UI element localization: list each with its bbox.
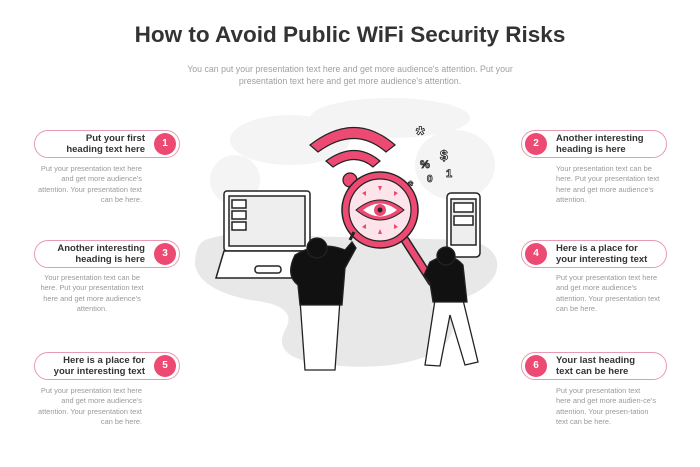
pill 3	[34, 240, 180, 268]
pill 2	[521, 130, 667, 158]
desc 6: Put your presentation text here and get more audien-ce's attention. Your presen-tation text can be here.	[556, 386, 656, 426]
item 1	[34, 130, 180, 204]
pill 6: Your last heading	[556, 355, 635, 366]
item 5	[34, 352, 180, 426]
title: How to Avoid Public WiFi Security Risks	[135, 22, 565, 47]
item 4	[521, 240, 667, 313]
pill 5: your interesting text	[54, 366, 145, 376]
symbols: $	[440, 147, 448, 163]
icon: laptop	[216, 191, 318, 278]
pill 5: Here is a place for	[63, 355, 145, 366]
desc 3: Your presentation text can be here. Put your presentation text here and get more audience's attention.	[40, 273, 144, 313]
subtitle: You can put your presentation text here and get more audience's attention. Put your presentation text here and get more audience's attention.	[187, 64, 513, 86]
symbols: 0	[427, 174, 433, 185]
icon: wifi arcs	[310, 128, 395, 187]
person left	[291, 232, 356, 370]
pill 2: heading is here	[556, 144, 626, 154]
pill 2: 2	[533, 138, 539, 149]
pill 5	[34, 352, 180, 380]
desc 2: Your presentation text can be here. Put your presentation text here and get more audience's attention.	[556, 164, 659, 204]
pill 4: your interesting text	[556, 254, 647, 264]
item 2	[521, 130, 667, 204]
pill 4: 4	[533, 248, 539, 259]
item 6	[521, 352, 667, 426]
desc 5: Put your presentation text here and get more audience's attention. Your presentation text can be here.	[38, 386, 142, 426]
pill 1: Put your first	[86, 133, 145, 144]
pill 4: Here is a place for	[556, 243, 638, 254]
icon: magnifier with eye	[342, 172, 432, 282]
pill 6	[521, 352, 667, 380]
pill 1	[34, 130, 180, 158]
symbols: 1	[446, 168, 452, 180]
desc 4: Put your presentation text here and get more audience's attention. Your presentation text can be here.	[556, 273, 660, 313]
floor blob	[195, 233, 497, 367]
desc 1: Put your presentation text here and get more audience's attention. Your presentation text can be here.	[38, 164, 142, 204]
pill 3: 3	[162, 248, 168, 259]
pill 5: 5	[162, 360, 168, 371]
world map background	[210, 98, 495, 205]
pill 6: text can be here	[556, 366, 628, 376]
person right	[424, 247, 478, 366]
icon: phone	[447, 193, 480, 257]
pill 1: heading text here	[66, 144, 145, 154]
symbols	[408, 122, 452, 193]
pill 1: 1	[162, 138, 168, 149]
item 3	[34, 240, 180, 313]
pill 2: Another interesting	[556, 133, 644, 144]
symbols: *	[416, 122, 425, 147]
pill 3: heading is here	[75, 254, 145, 264]
symbols: *	[408, 178, 414, 193]
pill 4	[521, 240, 667, 268]
pill 6: 6	[533, 360, 539, 371]
pill 3: Another interesting	[57, 243, 145, 254]
symbols: %	[420, 159, 430, 171]
